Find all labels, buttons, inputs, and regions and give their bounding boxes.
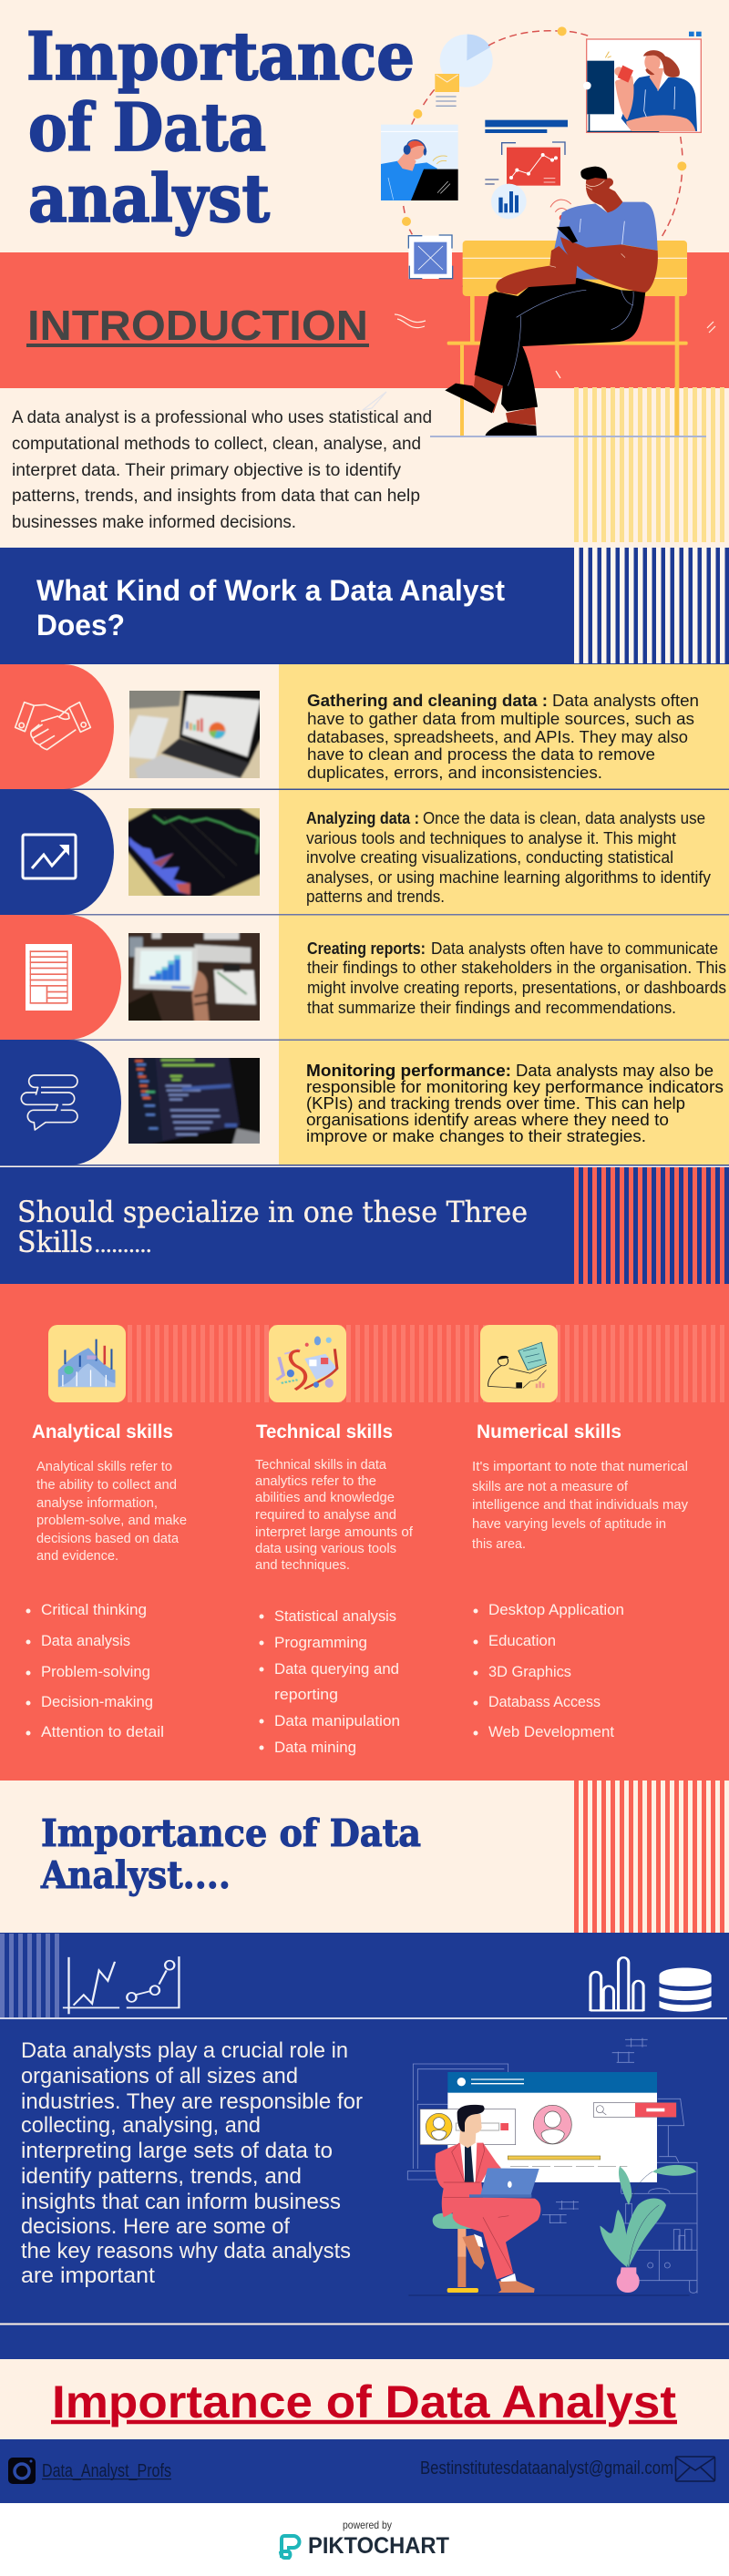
list: numerical skills: Databass Access — [488, 1693, 601, 1710]
list: technical skills — [259, 1607, 400, 1756]
text block: creating reports — [307, 939, 726, 1017]
text block: analytical skills description: problem-solve, and make — [36, 1514, 187, 1528]
text block: importance of data analysts: identify patterns, trends, and — [21, 2164, 302, 2189]
photo: tablet with bar chart on desk — [128, 933, 260, 1021]
text block: analyzing data: patterns and trends. — [306, 888, 445, 906]
panel: importance details — [0, 1933, 729, 2359]
panel: gathering and cleaning data — [0, 664, 699, 789]
panel: should specialize header — [0, 1167, 729, 1284]
text block: technical skills description: required to analyse and — [255, 1508, 396, 1523]
heading: should specialize: .......... — [94, 1232, 152, 1257]
panel: creating reports — [0, 915, 726, 1040]
list: analytical skills: Data analysis — [41, 1632, 130, 1649]
icon: technical tools — [269, 1325, 346, 1402]
icon: image placeholder card — [408, 235, 453, 279]
text block: creating reports: Creating reports: — [307, 939, 426, 958]
panel: importance header — [0, 1781, 729, 1933]
panel: work rows background — [0, 664, 729, 1167]
text block: monitoring performance: Data analysts may also be — [516, 1062, 714, 1080]
list: numerical skills: Education — [488, 1632, 556, 1649]
text block: numerical skills description: It's important to note that numerical — [472, 1460, 688, 1474]
illustration: yellow bench — [447, 241, 688, 436]
link: email address: Bestinstitutesdataanalyst@gmail.com — [420, 2458, 673, 2479]
text block: numerical skills description: have varying levels of aptitude in — [472, 1517, 666, 1532]
panel: contact footer — [0, 2439, 729, 2503]
illustration: data analyst on a bench — [363, 26, 715, 437]
title — [26, 17, 415, 237]
icon: chart trend — [0, 789, 114, 915]
list: numerical skills: Web Development — [488, 1723, 614, 1740]
text block: analytical skills description: analyse information, — [36, 1496, 158, 1511]
illustration: woman on video call — [583, 39, 701, 132]
decoration: line furniture — [407, 2038, 697, 2294]
photo: laptop with charts — [129, 691, 260, 778]
list: analytical skills: Attention to detail — [41, 1723, 164, 1740]
text block: importance of data analysts: collecting, analysing, and — [21, 2113, 261, 2138]
text block: introduction: patterns, trends, and insights from data that can help — [12, 487, 420, 506]
text block: analyzing data: Analyzing data : — [306, 809, 419, 827]
text block: gathering and cleaning data — [307, 692, 699, 782]
heading: importance of data analyst: Importance of Data — [41, 1811, 421, 1855]
list: technical skills: Programming — [274, 1634, 367, 1651]
text block: creating reports: that summarize their findings and recommendations. — [307, 999, 676, 1017]
text block: technical skills description — [255, 1458, 414, 1573]
text block: importance of data analysts: industries. They are responsible for — [21, 2089, 363, 2114]
icon: chat bubbles — [0, 1040, 121, 1165]
heading: should specialize: Should specialize in one these Three — [17, 1195, 528, 1229]
text block: importance of data analysts — [21, 2038, 363, 2288]
list: technical skills: Statistical analysis — [274, 1607, 396, 1625]
panel: analyzing data — [0, 789, 711, 915]
text block: introduction: computational methods to collect, clean, analyse, and — [12, 435, 421, 454]
text block: gathering and cleaning data: Data analysts often — [552, 692, 699, 710]
heading: should specialize — [17, 1195, 528, 1259]
text block: gathering and cleaning data: duplicates, errors, and inconsistencies. — [307, 764, 602, 782]
text block: monitoring performance: responsible for monitoring key performance indicators — [306, 1078, 724, 1096]
text block: creating reports: their findings to other stakeholders in the organisation. This — [307, 959, 726, 977]
heading: importance of data analyst: Analyst.... — [40, 1853, 231, 1897]
text block: importance of data analysts: decisions. Here are some of — [21, 2214, 290, 2239]
text block: monitoring performance: organisations identify areas where they need to — [306, 1111, 669, 1129]
icon: person with board — [480, 1325, 558, 1402]
text block: monitoring performance: (KPIs) and tracking trends over time. This can help — [306, 1094, 685, 1113]
text block: importance of data analysts: organisations of all sizes and — [21, 2064, 298, 2089]
heading: should specialize: Skills — [17, 1225, 93, 1259]
photo: dark tablet with charts — [128, 808, 260, 896]
text block: monitoring performance — [306, 1062, 724, 1145]
decoration: waves and sparks — [363, 314, 715, 410]
illustration: plant — [600, 2165, 696, 2293]
text block: gathering and cleaning data: have to gather data from multiple sources, such as — [307, 710, 694, 728]
text block: introduction — [12, 408, 432, 532]
heading: importance of data analyst footer: Importance of Data Analyst — [52, 2376, 676, 2427]
text block: analytical skills description: the ability to collect and — [36, 1478, 177, 1493]
text block: technical skills description: abilities and knowledge — [255, 1491, 395, 1505]
illustration: red line chart card — [485, 120, 568, 219]
photo: code on laptop screen — [128, 1058, 260, 1144]
footer: powered by piktochart: PIKTOCHART — [308, 2533, 449, 2559]
list: analytical skills — [26, 1601, 164, 1740]
text block: technical skills description: Technical skills in data — [255, 1458, 387, 1473]
text block: monitoring performance: improve or make changes to their strategies. — [306, 1127, 646, 1145]
list: technical skills: Data querying and — [274, 1660, 399, 1678]
list: numerical skills: 3D Graphics — [488, 1663, 571, 1680]
text block: importance of data analysts: interpreting large sets of data to — [21, 2139, 333, 2163]
column: numerical skills — [472, 1325, 689, 1740]
column: technical skills — [255, 1325, 414, 1756]
link: instagram handle: Data_Analyst_Profs — [42, 2461, 171, 2481]
panel: closing title — [0, 2359, 729, 2439]
text block: gathering and cleaning data: have to clean and process the data to remove — [307, 745, 655, 764]
icon: analytical chart — [48, 1325, 126, 1402]
text block: gathering and cleaning data: Gathering and cleaning data : — [307, 692, 548, 710]
text block: introduction: A data analyst is a professional who uses statistical and — [12, 408, 432, 427]
text block: numerical skills description: skills are not a measure of — [472, 1480, 629, 1494]
text block: numerical skills description: intelligence and that individuals may — [472, 1498, 689, 1513]
icon: line charts — [63, 1956, 179, 2014]
section: header background — [0, 0, 729, 548]
panel: skills — [0, 1284, 729, 1781]
illustration: man with headset — [381, 125, 458, 200]
list: analytical skills: Critical thinking — [41, 1601, 147, 1618]
icon: piktochart logo — [281, 2536, 299, 2558]
title: of Data — [28, 88, 266, 166]
illustration: man in red suit — [433, 2105, 540, 2293]
list: technical skills: Data manipulation — [274, 1712, 400, 1729]
illustration: man with laptop and dashboard — [407, 2038, 697, 2295]
text block: analytical skills description — [36, 1460, 187, 1564]
list: numerical skills — [474, 1601, 624, 1740]
illustration: floating dashboard elements — [381, 26, 702, 296]
heading: what kind of work — [36, 574, 505, 641]
text block: creating reports: Data analysts often have to communicate — [431, 939, 718, 958]
title: Importance — [26, 17, 415, 95]
text block: analyzing data — [306, 809, 711, 906]
panel: monitoring performance — [0, 1040, 724, 1165]
text block: analytical skills description: decisions based on data — [36, 1532, 180, 1546]
heading: what kind of work: What Kind of Work a Data Analyst — [36, 574, 505, 607]
list: technical skills: Data mining — [274, 1739, 356, 1756]
text block: numerical skills description: this area. — [472, 1537, 526, 1552]
icon: bar chart and database — [590, 1957, 712, 2012]
text block: technical skills description: data using various tools — [255, 1542, 396, 1556]
text block: analyzing data: involve creating visualizations, conducting statistical — [306, 848, 673, 867]
text block: introduction: businesses make informed decisions. — [12, 513, 296, 532]
text block: technical skills description: interpret large amounts of — [255, 1525, 414, 1540]
heading: introduction: INTRODUCTION — [27, 302, 368, 349]
list: numerical skills: Desktop Application — [488, 1601, 624, 1618]
text block: analytical skills description: Analytical skills refer to — [36, 1460, 172, 1474]
text block: analyzing data: various tools and techniques to analyse it. This might — [306, 829, 676, 847]
text block: gathering and cleaning data: databases, spreadsheets, and APIs. They may also — [307, 728, 688, 746]
illustration: seated man — [445, 167, 658, 436]
icon: instagram — [8, 2458, 36, 2484]
decoration: ground line — [430, 436, 706, 437]
icon: handshake — [0, 664, 114, 789]
text block: technical skills description: and techniques. — [255, 1558, 350, 1573]
icon: report document — [0, 915, 121, 1040]
text block: analyzing data: analyses, or using machine learning algorithms to identify — [306, 868, 711, 887]
text block: importance of data analysts: Data analysts play a crucial role in — [21, 2038, 348, 2063]
text block: technical skills description: analytics refer to the — [255, 1474, 376, 1489]
text block: analytical skills description: and evidence. — [36, 1549, 118, 1564]
heading: technical skills: Technical skills — [256, 1421, 393, 1442]
heading: analytical skills: Analytical skills — [32, 1421, 173, 1442]
list: analytical skills: Problem-solving — [41, 1663, 150, 1680]
panel: what kind of work header — [0, 548, 729, 664]
footer: powered by piktochart: powered by — [343, 2519, 392, 2531]
text block: monitoring performance: Monitoring performance: — [306, 1062, 511, 1080]
list: technical skills: reporting — [274, 1686, 338, 1703]
text block: analyzing data: Once the data is clean, data analysts use — [423, 809, 705, 827]
heading: importance of data analyst — [40, 1811, 421, 1897]
text block: importance of data analysts: are important — [21, 2263, 155, 2288]
footer: powered by piktochart — [0, 2503, 729, 2576]
text block: importance of data analysts: the key reasons why data analysts — [21, 2239, 351, 2263]
heading: numerical skills: Numerical skills — [477, 1421, 621, 1442]
heading: what kind of work: Does? — [36, 609, 125, 641]
list: analytical skills: Decision-making — [41, 1693, 153, 1710]
icon: envelope — [676, 2457, 714, 2481]
title: analyst — [28, 159, 270, 237]
text block: introduction: interpret data. Their primary objective is to identify — [12, 461, 402, 480]
column: analytical skills — [26, 1325, 187, 1740]
text block: numerical skills description — [472, 1460, 689, 1552]
panel: dashboard window — [420, 2072, 676, 2182]
text block: importance of data analysts: insights that can inform business — [21, 2190, 341, 2214]
